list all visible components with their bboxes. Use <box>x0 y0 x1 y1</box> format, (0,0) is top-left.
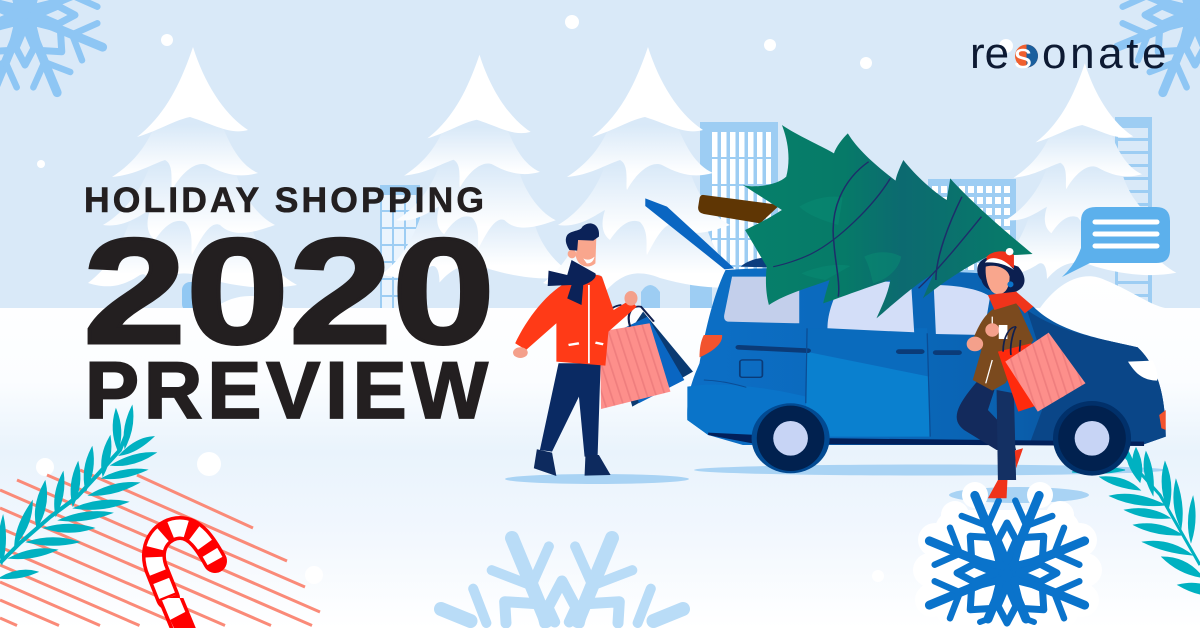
car tailgate <box>645 198 734 269</box>
car windows <box>724 277 799 323</box>
resonate logo: s <box>1014 35 1032 76</box>
pine tree right <box>992 63 1176 279</box>
snow mound behind blue snowflake <box>913 482 1102 628</box>
snowflake bottom centre <box>441 538 683 623</box>
teal branch right <box>1072 447 1200 594</box>
speech bubble <box>1062 207 1170 277</box>
illustration: car, tree and shoppers <box>513 125 1166 498</box>
title: 2020: 2020 <box>83 207 495 375</box>
resonate logo: onate <box>1042 29 1170 78</box>
tree ropes <box>773 162 981 297</box>
pine tree left <box>88 47 297 292</box>
title: preview: PREVIEW <box>85 346 489 436</box>
resonate logo: re <box>970 29 1009 78</box>
christmas tree on roof <box>743 125 1033 318</box>
title: holiday shopping: HOLIDAY SHOPPING <box>84 180 484 220</box>
tree trunk <box>698 195 780 223</box>
snowflake top left <box>0 0 110 100</box>
resonate logo <box>970 29 1170 78</box>
pine tree centre left <box>382 55 576 283</box>
candy cane <box>154 528 215 628</box>
snow ground <box>0 276 1200 628</box>
tail light <box>700 335 722 357</box>
wheels <box>752 403 830 473</box>
door handles <box>739 347 959 353</box>
ground shadows <box>505 464 1166 503</box>
headlight <box>1128 361 1158 381</box>
falling snow dots <box>36 15 1013 584</box>
city buildings <box>182 117 1152 312</box>
woman shopper <box>957 248 1085 498</box>
car body <box>687 268 1166 445</box>
man shopper <box>513 223 693 476</box>
red stripes panel <box>0 470 320 626</box>
snowflake top right <box>1110 0 1200 100</box>
snowflake bottom right <box>922 488 1092 624</box>
teal branch left <box>0 407 155 578</box>
pine tree centre <box>543 47 752 292</box>
car <box>645 198 1166 476</box>
